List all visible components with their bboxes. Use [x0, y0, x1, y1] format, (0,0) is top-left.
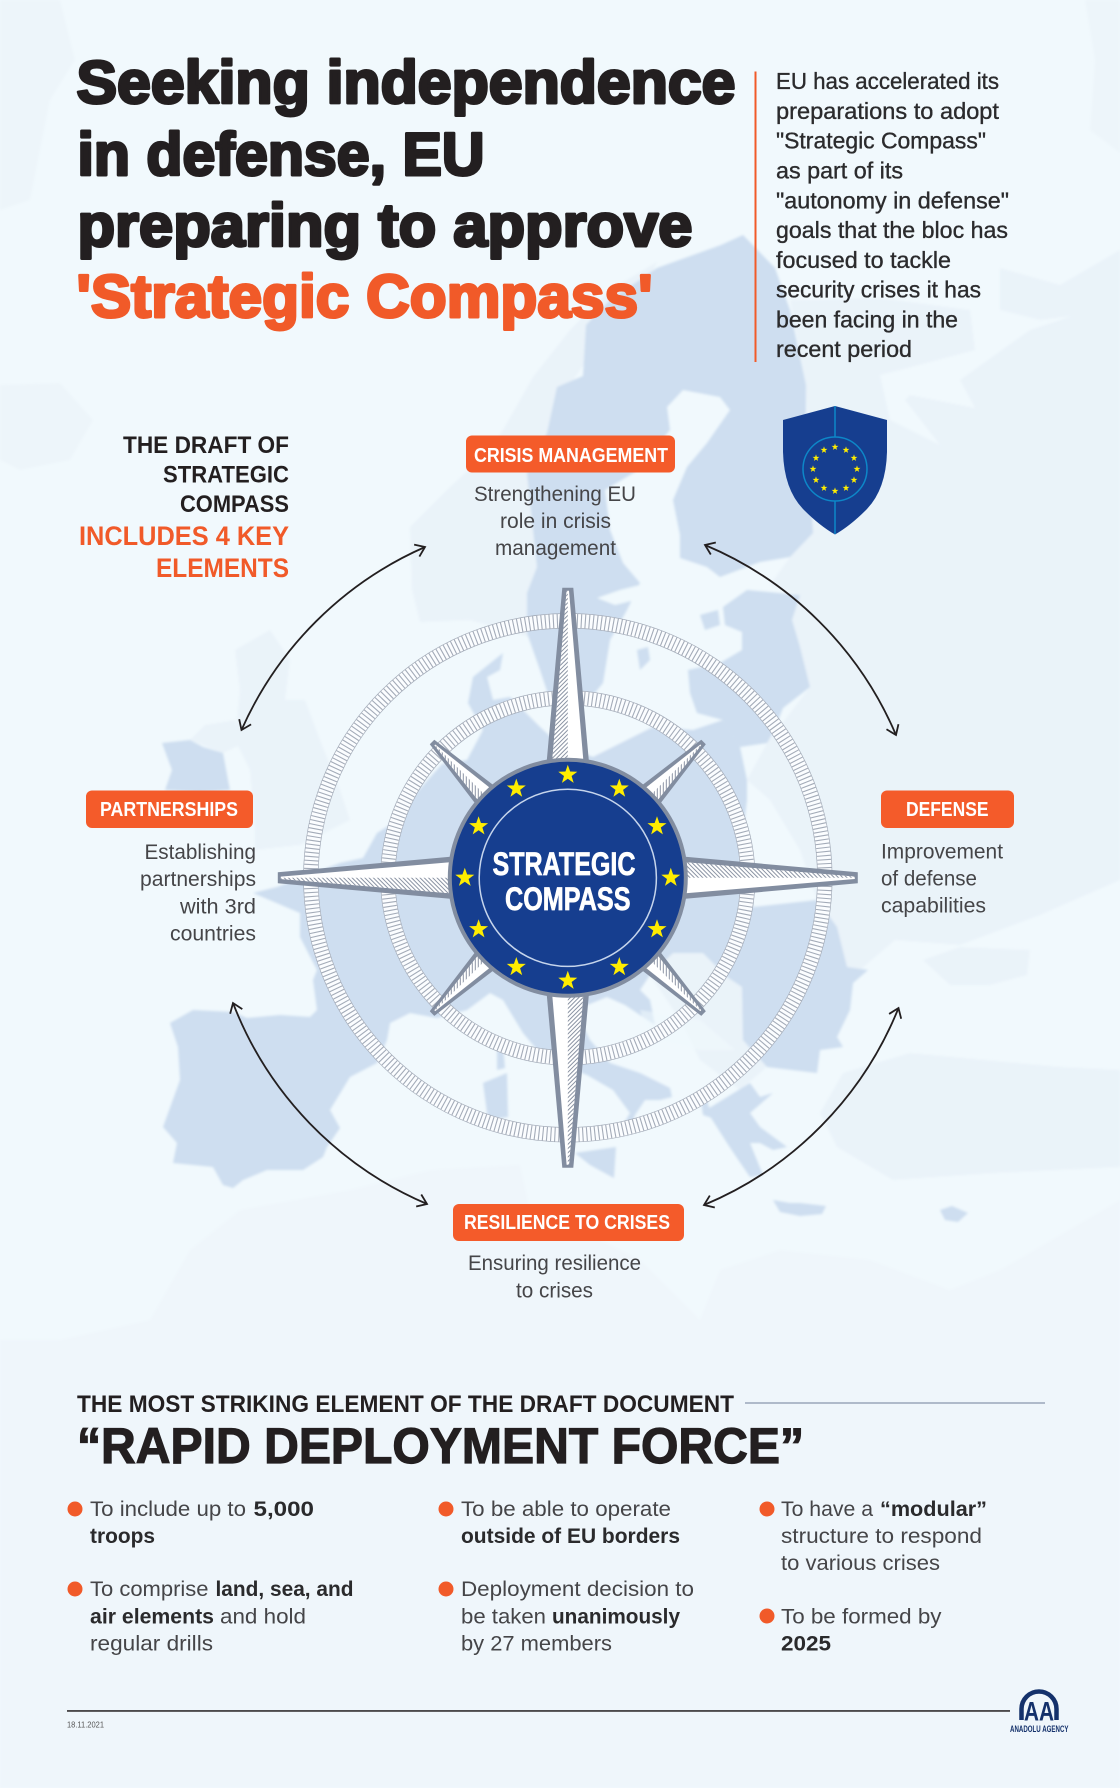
bullet: unanimous decision: by 27 members — [461, 1632, 612, 1656]
bullet: 5,000 troops — [68, 1498, 314, 1548]
bullet: modular structure: To have a — [781, 1498, 873, 1521]
compass graphic — [278, 588, 858, 1168]
hub with EU stars: COMPASS — [505, 881, 630, 917]
bullet: 5,000 troops: To include up to — [90, 1498, 246, 1521]
panel: partnerships: partnerships — [140, 868, 256, 891]
heading: rapid deployment force: “RAPID DEPLOYMENT FORCE” — [77, 1418, 804, 1474]
title — [76, 49, 736, 330]
title: in defense, EU — [78, 121, 484, 188]
inner rope ring — [381, 691, 755, 1065]
heading: the draft includes 4 key elements: THE DRAFT OF — [123, 432, 289, 459]
bullet: modular structure: “modular” — [880, 1498, 987, 1521]
hub with EU stars: STRATEGIC — [492, 846, 636, 882]
bullet: land, sea and air elements: To comprise — [90, 1578, 208, 1601]
bullet: outside of EU borders: To be able to operate — [461, 1498, 671, 1521]
icon: Anadolu Agency logo: ANADOLU AGENCY — [1010, 1724, 1068, 1734]
arrow: crisis management to defense — [705, 545, 896, 735]
bullet: outside of EU borders: outside of EU borders — [461, 1525, 680, 1548]
outer rope ring — [304, 614, 832, 1142]
bullet: land, sea and air elements: and hold — [220, 1606, 306, 1628]
panel: partnerships: PARTNERSHIPS — [100, 799, 238, 821]
arrow: crisis management to partnerships — [242, 547, 425, 730]
intro text block: preparations to adopt — [776, 98, 1000, 124]
intro text block: been facing in the — [776, 306, 958, 332]
bullet: outside of EU borders — [438, 1498, 680, 1548]
arrow: defense to resilience — [704, 1008, 898, 1205]
bullet: 5,000 troops: 5,000 — [254, 1498, 314, 1521]
panel: resilience to crises: RESILIENCE TO CRISES — [464, 1212, 670, 1234]
intro text block: goals that the bloc has — [776, 217, 1008, 243]
bullet: unanimous decision: Deployment decision to — [461, 1578, 694, 1601]
panel: crisis management — [466, 436, 675, 560]
panel: defense — [881, 790, 1014, 918]
icon: Anadolu Agency logo — [1010, 1692, 1068, 1734]
intro text block: security crises it has — [776, 276, 981, 302]
panel: defense: DEFENSE — [906, 799, 988, 821]
bullet: modular structure — [760, 1498, 987, 1575]
heading: the draft includes 4 key elements — [79, 432, 289, 583]
bullet: unanimous decision: unanimously — [552, 1606, 680, 1628]
intro text block: focused to tackle — [776, 247, 951, 273]
panel: partnerships: Establishing — [144, 841, 256, 864]
heading: the draft includes 4 key elements: ELEMENTS — [156, 553, 289, 583]
bullet: land, sea and air elements: regular drills — [90, 1632, 213, 1656]
heading: the draft includes 4 key elements: COMPASS — [180, 491, 289, 518]
bullet: formed by 2025: 2025 — [781, 1632, 831, 1656]
panel: defense: of defense — [881, 868, 977, 890]
bullet: land, sea and air elements: land, sea, and — [216, 1578, 354, 1601]
panel: defense: capabilities — [881, 894, 986, 918]
bullet: formed by 2025: To be formed by — [781, 1606, 942, 1628]
intro text block — [776, 68, 1009, 362]
icon: Anadolu Agency logo: AA — [1024, 1696, 1054, 1726]
intro text block: recent period — [776, 336, 912, 362]
bullet: 5,000 troops: troops — [90, 1525, 155, 1548]
panel: resilience to crises — [453, 1204, 684, 1302]
compass points — [278, 588, 858, 1168]
heading: most striking element: THE MOST STRIKING ELEMENT OF THE DRAFT DOCUMENT — [77, 1391, 734, 1418]
bullet: land, sea and air elements — [68, 1578, 354, 1656]
panel: partnerships: countries — [170, 922, 256, 946]
icon: EU shield — [783, 406, 887, 534]
bullet: unanimous decision: be taken — [461, 1606, 546, 1628]
hub with EU stars — [450, 760, 686, 996]
intro text block: EU has accelerated its — [776, 68, 999, 94]
heading: the draft includes 4 key elements: STRATEGIC — [163, 462, 289, 488]
panel: crisis management: CRISIS MANAGEMENT — [474, 445, 668, 467]
title: preparing to approve — [78, 192, 692, 259]
panel: defense: Improvement — [881, 840, 1003, 864]
bullet: unanimous decision — [438, 1578, 694, 1656]
bullet: modular structure: to various crises — [781, 1552, 940, 1575]
panel: resilience to crises: to crises — [516, 1280, 593, 1302]
arrow: partnerships to resilience — [233, 1003, 427, 1204]
panel: crisis management: management — [495, 537, 616, 560]
footer rule and date: 18.11.2021 — [67, 1720, 104, 1730]
panel: partnerships — [86, 790, 256, 946]
divider line beside intro text — [754, 72, 756, 362]
intro text block: "Strategic Compass" — [776, 128, 986, 154]
bullet: modular structure: structure to respond — [781, 1525, 982, 1548]
intro text block: as part of its — [776, 158, 903, 184]
heading: the draft includes 4 key elements: INCLUDES 4 KEY — [79, 521, 289, 551]
title: 'Strategic Compass' — [76, 263, 652, 330]
bullet: land, sea and air elements: air elements — [90, 1606, 214, 1628]
bullet: formed by 2025 — [760, 1606, 942, 1656]
panel: crisis management: Strengthening EU — [474, 483, 636, 506]
intro text block: "autonomy in defense" — [776, 188, 1009, 214]
panel: partnerships: with 3rd — [179, 896, 256, 918]
title: Seeking independence — [76, 49, 736, 116]
panel: resilience to crises: Ensuring resilience — [468, 1252, 641, 1275]
panel: crisis management: role in crisis — [500, 510, 611, 533]
